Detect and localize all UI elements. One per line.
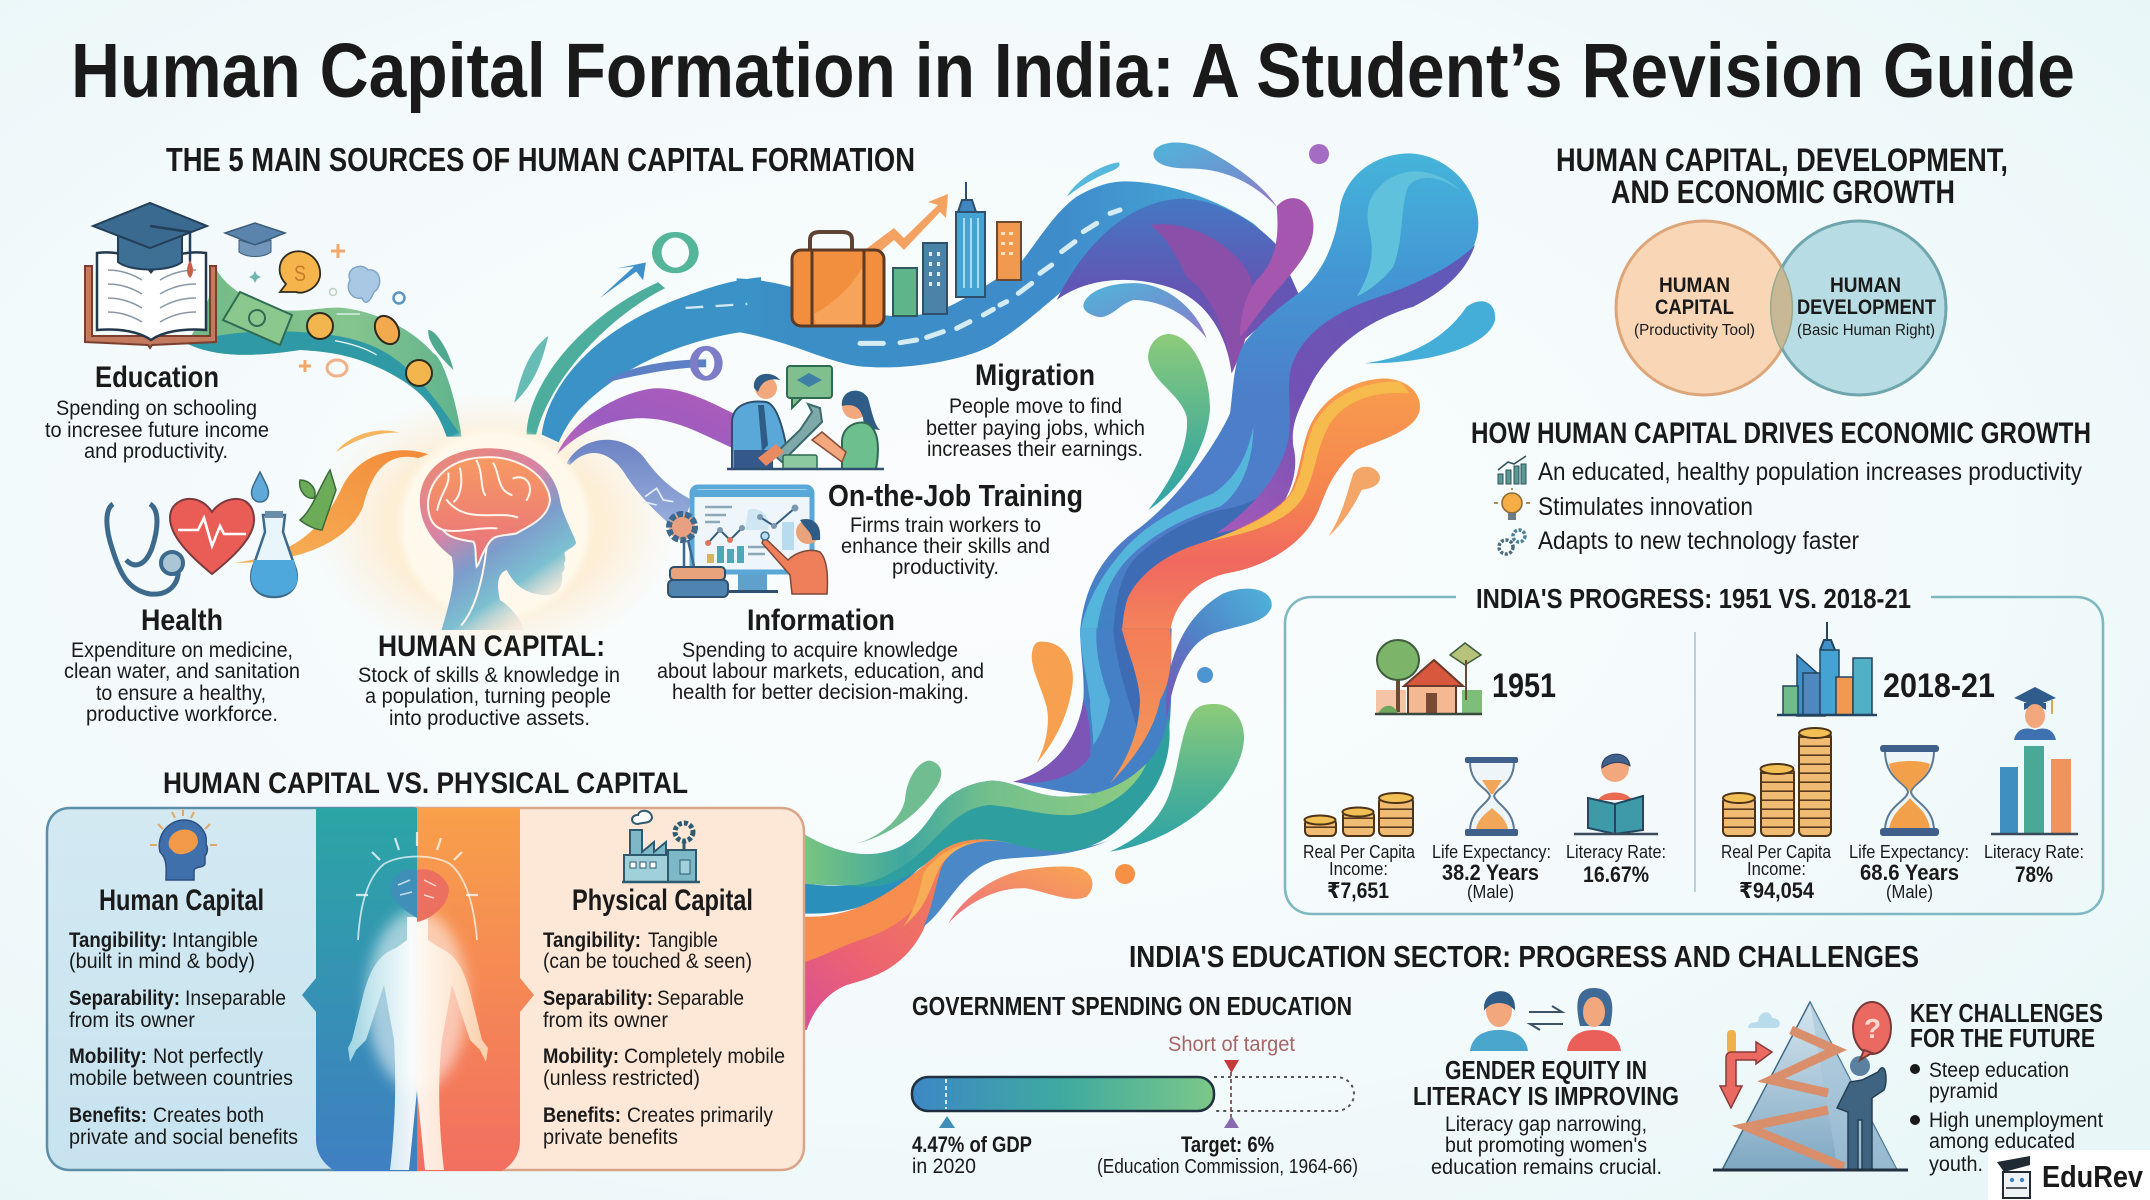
- gender equity: education remains crucial.: [1431, 1156, 1662, 1179]
- text: training: productivity.: [892, 556, 999, 579]
- icon: coin stacks 2018-21: [1723, 728, 1831, 836]
- physical capital text: (unless restricted): [543, 1067, 700, 1090]
- icon: light bulb: [1494, 488, 1530, 520]
- stat block 2018-21: Income:: [1747, 859, 1806, 879]
- icon: education book and cap: [85, 203, 216, 348]
- key challenges: youth.: [1929, 1153, 1983, 1176]
- text: information: Information: [747, 604, 895, 637]
- icon: money flowing: [223, 223, 432, 386]
- icon: money flowing: S: [294, 261, 306, 286]
- text: information: health for better decision-making.: [672, 681, 969, 704]
- physical capital text: Mobility:: [543, 1045, 619, 1068]
- icon: gears: [1499, 530, 1525, 554]
- icon: coin stacks 1951: [1304, 793, 1413, 836]
- stat block 2018-21: Life Expectancy:: [1849, 842, 1969, 862]
- heading: human capital development and growth: [1556, 142, 2008, 210]
- venn diagram: [1616, 221, 1946, 395]
- text: human capital centre: a population, turning people: [365, 685, 611, 708]
- key challenges: KEY CHALLENGES: [1910, 998, 2103, 1028]
- list: growth drivers: An educated, healthy population increases productivity: [1538, 458, 2082, 486]
- icon: brain and head: [395, 425, 595, 630]
- key challenges: Steep education: [1929, 1059, 2069, 1082]
- text: health: Expenditure on medicine,: [71, 639, 293, 662]
- physical capital text: (can be touched & seen): [543, 950, 752, 973]
- human capital text: Inseparable: [185, 987, 286, 1010]
- text: training: enhance their skills and: [841, 535, 1050, 558]
- rivers: other sources: [233, 235, 761, 563]
- text: training: Firms train workers to: [850, 514, 1041, 537]
- panel: human vs physical capital comparison: [47, 808, 804, 1171]
- icon: health stethoscope heart flask: [107, 470, 336, 597]
- stat block 2018-21: (Male): [1886, 882, 1933, 902]
- key challenges: High unemployment: [1929, 1109, 2103, 1132]
- list: growth drivers: Stimulates innovation: [1538, 493, 1753, 521]
- panel: India's progress: 1951: [1492, 667, 1556, 705]
- text: education: [45, 361, 269, 463]
- human capital text: Human Capital: [99, 884, 264, 917]
- chart: government spending on education: [912, 991, 1358, 1178]
- halo behind brain: [310, 390, 680, 660]
- venn diagram: DEVELOPMENT: [1797, 296, 1936, 319]
- text: migration: [926, 359, 1145, 461]
- gender equity: [1413, 988, 1679, 1179]
- icon: village house 1951: [1375, 640, 1482, 714]
- stat block 2018-21: Literacy Rate:: [1984, 842, 2084, 862]
- text: human capital centre: HUMAN CAPITAL:: [378, 630, 605, 663]
- human capital text: Creates both: [153, 1104, 264, 1127]
- human capital text: Separability:: [69, 987, 180, 1010]
- icon: factory and gear: [622, 811, 700, 882]
- text: health: [64, 604, 300, 726]
- icon: training team: [727, 366, 884, 469]
- venn diagram: HUMAN: [1659, 274, 1730, 297]
- stat block 2018-21: [1721, 842, 2084, 903]
- icon: migration suitcase and city: [792, 182, 1021, 326]
- panel: India's progress: 2018-21: [1883, 667, 1995, 705]
- heading: human capital development and growth: HUMAN CAPITAL, DEVELOPMENT,: [1556, 142, 2008, 178]
- text: information: about labour markets, education, and: [657, 660, 984, 683]
- text: human capital centre: Stock of skills & knowledge in: [358, 664, 620, 687]
- text: human capital centre: into productive assets.: [389, 707, 590, 730]
- icon: head with brain: [150, 810, 217, 880]
- icon: hourglass 2018-21: [1880, 745, 1939, 836]
- text: education: and productivity.: [84, 440, 228, 463]
- chart: government spending on education: in 2020: [912, 1155, 976, 1178]
- human capital text: Not perfectly: [153, 1045, 263, 1068]
- stat block 1951: 16.67%: [1583, 862, 1649, 887]
- text: education: to incresee future income: [45, 419, 269, 442]
- icon: hourglass 1951: [1465, 757, 1518, 836]
- chart: government spending on education: Target: 6%: [1181, 1132, 1274, 1157]
- stat block 2018-21: ₹94,054: [1739, 878, 1815, 903]
- physical capital text: Separable: [657, 987, 744, 1010]
- physical capital text: Separability:: [543, 987, 653, 1010]
- physical capital text: Completely mobile: [624, 1045, 785, 1068]
- chart: government spending on education: (Education Commission, 1964-66): [1097, 1156, 1358, 1178]
- gender equity: Literacy gap narrowing,: [1445, 1113, 1647, 1136]
- central flowing colour ribbon: lower: [800, 589, 1272, 1030]
- text: migration: increases their earnings.: [927, 438, 1143, 461]
- logo: EduRev: [1988, 1150, 2150, 1200]
- stat block 1951: Real Per Capita: [1303, 842, 1416, 862]
- text: health: productive workforce.: [86, 703, 278, 726]
- text: health: clean water, and sanitation: [64, 660, 300, 683]
- venn diagram: CAPITAL: [1655, 296, 1734, 319]
- stat block 1951: Life Expectancy:: [1432, 842, 1551, 862]
- icon: graduate and bars 2018-21: [1991, 687, 2078, 834]
- list: growth drivers: [1494, 456, 2082, 555]
- heading: education sector: INDIA'S EDUCATION SECTOR: PROGRESS AND CHALLENGES: [1129, 939, 1919, 974]
- text: training: On-the-Job Training: [828, 478, 1083, 513]
- venn diagram: HUMAN: [1830, 274, 1901, 297]
- text: information: [657, 604, 984, 704]
- physical capital text: [543, 884, 785, 1149]
- heading: human capital development and growth: AND ECONOMIC GROWTH: [1611, 174, 1955, 210]
- text: education: Spending on schooling: [56, 397, 257, 420]
- venn diagram: (Productivity Tool): [1634, 322, 1755, 339]
- text: human capital centre: [358, 630, 620, 730]
- human capital text: Benefits:: [69, 1104, 147, 1127]
- key challenges: among educated: [1929, 1130, 2075, 1153]
- gender equity: LITERACY IS IMPROVING: [1413, 1081, 1679, 1111]
- human capital text: private and social benefits: [69, 1126, 298, 1149]
- stat block 1951: 38.2 Years: [1442, 860, 1539, 885]
- key challenges: [1910, 998, 2103, 1176]
- human capital text: [69, 884, 298, 1149]
- human capital text: (built in mind & body): [69, 950, 255, 973]
- panel: India's progress: [1285, 583, 2103, 914]
- chart: government spending on education: Short of target: [1168, 1033, 1295, 1056]
- icon: child reading 1951: [1574, 754, 1658, 834]
- stat block 2018-21: 68.6 Years: [1860, 860, 1959, 885]
- physical capital text: private benefits: [543, 1126, 678, 1149]
- stat block 1951: ₹7,651: [1327, 878, 1389, 903]
- physical capital text: Physical Capital: [572, 884, 753, 917]
- human capital text: mobile between countries: [69, 1067, 293, 1090]
- gender equity: GENDER EQUITY IN: [1445, 1055, 1647, 1085]
- river: education: [187, 270, 462, 437]
- venn diagram: (Basic Human Right): [1797, 322, 1935, 339]
- icon: information monitor and person: [668, 487, 827, 597]
- rivers: training and information: [557, 388, 733, 533]
- human capital text: Intangible: [172, 929, 258, 952]
- human capital text: Mobility:: [69, 1045, 147, 1068]
- text: health: Health: [141, 604, 223, 637]
- text: migration: Migration: [975, 359, 1095, 392]
- text: training: [828, 478, 1083, 579]
- physical capital text: Tangible: [648, 929, 718, 952]
- chart: government spending on education: GOVERNMENT SPENDING ON EDUCATION: [912, 991, 1352, 1021]
- central flowing colour ribbon: upper: [737, 142, 1495, 633]
- panel: India's progress: INDIA'S PROGRESS: 1951 VS. 2018-21: [1476, 583, 1911, 614]
- icon: steep education pyramid with figure: [1713, 1002, 1908, 1170]
- physical capital text: Benefits:: [543, 1104, 621, 1127]
- icon: city 2018-21: [1777, 622, 1877, 716]
- icon: human figure with glowing brain: [348, 832, 488, 1170]
- key challenges: FOR THE FUTURE: [1910, 1023, 2095, 1053]
- list: growth drivers: Adapts to new technology faster: [1538, 527, 1859, 555]
- gender equity: but promoting women's: [1445, 1134, 1647, 1157]
- stat block 1951: (Male): [1467, 882, 1514, 902]
- text: migration: better paying jobs, which: [926, 417, 1145, 440]
- stat block 1951: Literacy Rate:: [1566, 842, 1666, 862]
- physical capital text: Tangibility:: [543, 929, 641, 952]
- human capital text: Tangibility:: [69, 929, 167, 952]
- key challenges: pyramid: [1929, 1080, 1998, 1103]
- icon: man and woman with arrows: [1470, 988, 1621, 1051]
- chart: government spending on education: 4.47% of GDP: [912, 1132, 1032, 1157]
- heading: human vs physical: HUMAN CAPITAL VS. PHYSICAL CAPITAL: [163, 767, 688, 800]
- physical capital text: from its owner: [543, 1009, 668, 1032]
- text: migration: People move to find: [949, 395, 1122, 418]
- stat block 1951: [1303, 842, 1666, 903]
- stat block 1951: Income:: [1329, 859, 1388, 879]
- human capital text: from its owner: [69, 1009, 195, 1032]
- text: information: Spending to acquire knowledge: [682, 639, 958, 662]
- text: education: Education: [95, 361, 219, 394]
- stat block 2018-21: Real Per Capita: [1721, 842, 1832, 862]
- physical capital text: Creates primarily: [627, 1104, 773, 1127]
- stat block 2018-21: 78%: [2015, 862, 2053, 887]
- icon: growth chart: [1498, 456, 1526, 484]
- decorative dots: [1115, 144, 1329, 884]
- text: health: to ensure a healthy,: [96, 682, 266, 705]
- icon: steep education pyramid with figure: ?: [1864, 1013, 1881, 1044]
- heading: 5 main sources: THE 5 MAIN SOURCES OF HUMAN CAPITAL FORMATION: [166, 141, 915, 178]
